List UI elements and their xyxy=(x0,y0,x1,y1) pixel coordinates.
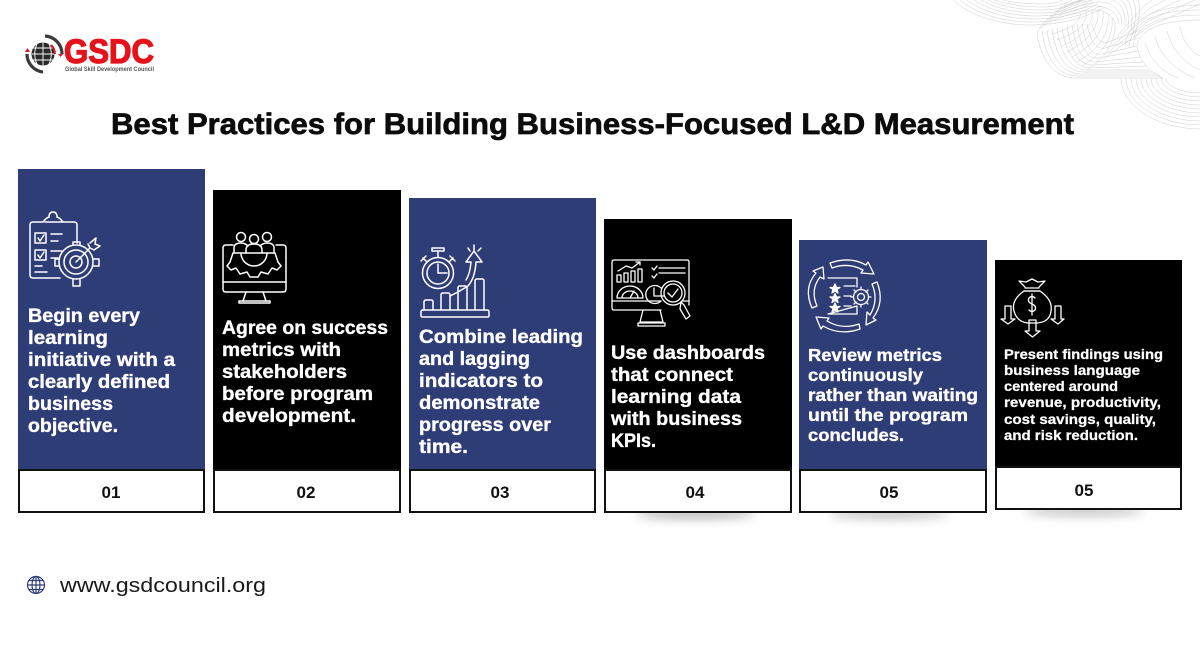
step text: and risk reduction. xyxy=(1004,428,1138,443)
number box xyxy=(800,470,986,512)
card background xyxy=(213,190,401,469)
step text xyxy=(1004,347,1163,443)
step text: rather than waiting xyxy=(808,385,978,405)
logo: GSDC xyxy=(25,33,154,73)
step text: centered around xyxy=(1004,379,1118,394)
step number: 03 xyxy=(491,483,509,502)
panel: step 02 xyxy=(213,190,401,512)
step text: business xyxy=(28,394,113,415)
step text: Begin every xyxy=(28,306,140,327)
icon: team and gear on monitor xyxy=(223,232,286,303)
shadow under box xyxy=(829,509,949,519)
step text: Review metrics xyxy=(808,345,942,365)
number box xyxy=(214,470,400,512)
step text: Present findings using xyxy=(1004,347,1163,362)
step text xyxy=(419,327,583,458)
step text xyxy=(28,306,175,437)
step text: development. xyxy=(222,406,356,427)
step text: with business xyxy=(610,409,742,430)
shadow under box xyxy=(1024,506,1144,516)
card background xyxy=(409,198,596,469)
step number: 04 xyxy=(686,483,705,502)
step text: demonstrate xyxy=(419,393,540,414)
icon: money bag with down arrows xyxy=(1001,279,1064,337)
step text: learning xyxy=(28,328,108,349)
step text: Use dashboards xyxy=(611,343,765,364)
logo tagline: Global Skill Development Council xyxy=(65,67,154,73)
step text: continuously xyxy=(808,365,923,385)
step text: stakeholders xyxy=(222,362,347,383)
panel: step 03 xyxy=(409,198,596,512)
step text: learning data xyxy=(611,387,741,408)
panel: step 06 xyxy=(995,260,1182,516)
step text: Combine leading xyxy=(419,327,583,348)
website address: www.gsdcouncil.org xyxy=(59,575,266,597)
step text xyxy=(222,318,388,427)
icon: stopwatch and growth chart xyxy=(421,245,489,317)
step text: objective. xyxy=(28,416,118,437)
logo globe icon xyxy=(25,36,63,72)
step text: indicators to xyxy=(419,371,543,392)
number box xyxy=(19,470,204,512)
step text: progress over xyxy=(419,415,552,436)
panel: step 04 xyxy=(604,219,792,519)
step text: metrics with xyxy=(222,340,341,361)
step text: business language xyxy=(1004,363,1141,378)
step text: before program xyxy=(222,384,373,405)
step text: initiative with a xyxy=(28,350,175,371)
icon: globe xyxy=(28,576,44,594)
step text: Agree on success xyxy=(222,318,388,339)
logo wordmark: GSDC xyxy=(64,33,154,71)
step text: until the program xyxy=(808,405,968,425)
step text: KPIs. xyxy=(611,431,656,452)
step text: clearly defined xyxy=(28,372,170,393)
step number: 05 xyxy=(880,483,898,502)
step text: that connect xyxy=(611,365,734,386)
step number: 05 xyxy=(1075,481,1093,500)
icon: review cycle with checklist and gear xyxy=(808,260,880,332)
footer: website xyxy=(28,575,266,597)
number box xyxy=(410,470,595,512)
card background xyxy=(995,260,1182,466)
panel: step 01 xyxy=(18,169,205,512)
step text xyxy=(610,343,765,452)
step text: and lagging xyxy=(419,349,530,370)
icon: clipboard with target xyxy=(30,212,100,286)
step text: time. xyxy=(419,437,468,458)
card background xyxy=(18,169,205,469)
step text: concludes. xyxy=(808,425,904,445)
card background xyxy=(604,219,792,469)
number box xyxy=(605,470,791,512)
number box xyxy=(996,467,1181,509)
card background xyxy=(799,240,987,469)
step number: 02 xyxy=(297,483,315,502)
panel: step 05 xyxy=(799,240,987,519)
icon: dashboard monitor with magnifier xyxy=(612,260,690,326)
step text xyxy=(808,345,978,445)
step text: revenue, productivity, xyxy=(1004,395,1161,410)
step text: cost savings, quality, xyxy=(1004,412,1156,427)
decorative line-art swirl xyxy=(953,0,1200,129)
title: Best Practices for Building Business-Focused L&D Measurement xyxy=(111,108,1074,141)
step number: 01 xyxy=(102,483,120,502)
shadow under box xyxy=(635,509,755,519)
